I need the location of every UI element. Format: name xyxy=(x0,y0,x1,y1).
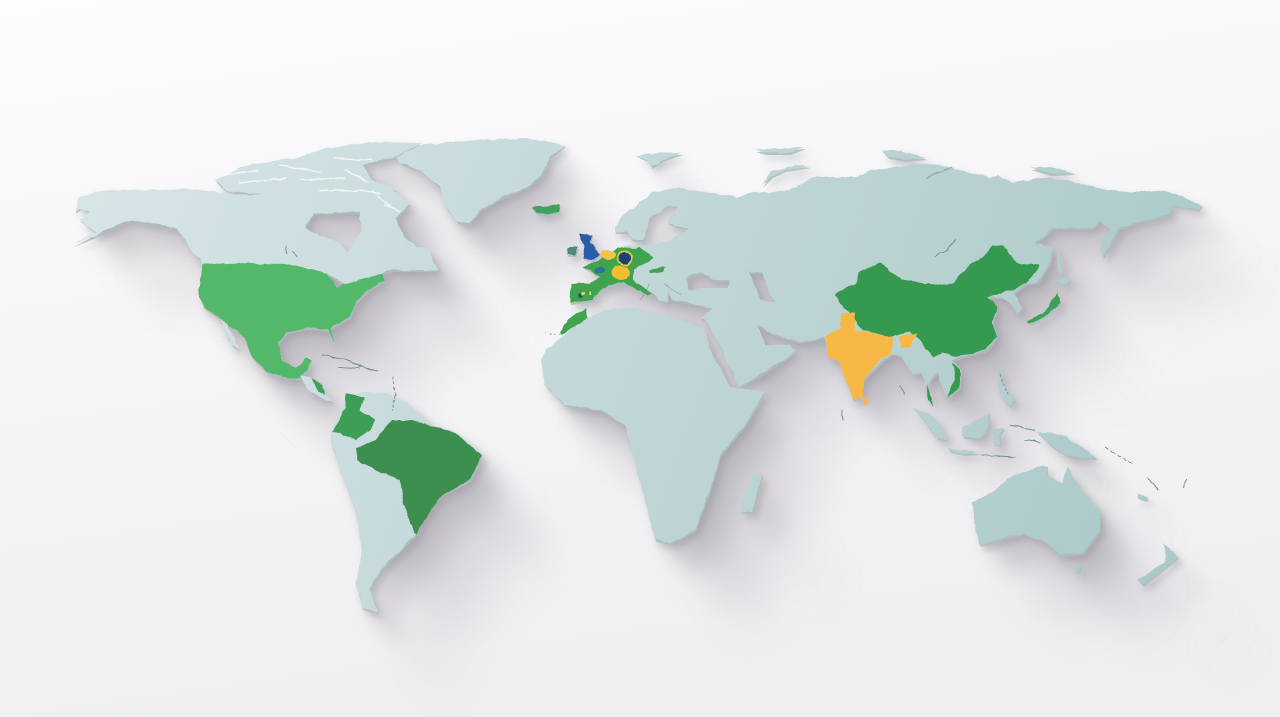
Africa xyxy=(541,307,765,543)
Central America xyxy=(300,376,333,402)
Japan green xyxy=(1027,292,1060,324)
Tasmania xyxy=(1075,565,1081,572)
Morocco green xyxy=(560,308,588,335)
United States and Mexico xyxy=(198,263,385,378)
Java xyxy=(948,448,980,454)
Western and Central Europe green xyxy=(570,247,653,303)
Sulawesi xyxy=(993,428,1005,445)
Novaya Zemlya xyxy=(762,165,810,186)
world map xyxy=(73,138,1202,612)
New Guinea xyxy=(1037,432,1097,458)
Germany flag disc xyxy=(617,250,633,266)
Greenland xyxy=(397,138,565,223)
Great Britain blue xyxy=(580,233,600,260)
Philippines xyxy=(996,368,1015,406)
Eurasia xyxy=(615,163,1202,407)
Ireland xyxy=(567,247,578,255)
North America: Canada and Alaska xyxy=(73,189,438,285)
Severnaya Zemlya xyxy=(882,150,926,160)
Europe cluster xyxy=(560,233,665,335)
Japan and Sakhalin xyxy=(1027,250,1072,324)
Ireland dark green xyxy=(567,247,578,255)
Borneo xyxy=(962,412,990,439)
land base silhouettes xyxy=(73,138,1202,612)
long soft shadows xyxy=(74,140,1280,704)
Great Britain xyxy=(580,233,600,260)
New Caledonia xyxy=(1138,494,1148,500)
Iceland xyxy=(532,205,560,215)
India xyxy=(825,313,893,400)
Australia xyxy=(972,465,1100,555)
Brazil xyxy=(356,420,482,535)
Arctic islands xyxy=(215,142,422,196)
Western Europe base xyxy=(570,247,653,303)
Siberian islands xyxy=(1030,167,1075,174)
Franz Josef Land xyxy=(755,147,805,153)
Balkan green patch xyxy=(650,267,665,273)
fine details: lakes, inlets, tiny islands xyxy=(286,168,1187,490)
US and Mexico base xyxy=(198,263,385,378)
Alps yellow xyxy=(611,266,629,280)
France blue mark xyxy=(595,267,605,273)
Svalbard xyxy=(636,153,682,167)
Colombia and Venezuela xyxy=(332,393,375,440)
Arctic archipelago channels xyxy=(225,158,400,212)
South America xyxy=(330,392,482,612)
Spain flag marks xyxy=(579,292,592,297)
Madagascar xyxy=(740,472,762,512)
Central America green patch xyxy=(312,378,325,396)
Iceland green xyxy=(532,205,560,215)
Kamchatka xyxy=(1100,227,1120,257)
Germany flag inner xyxy=(619,252,631,264)
China xyxy=(835,245,1040,357)
Vietnam and Malaysia strips xyxy=(926,362,960,407)
New Zealand xyxy=(1138,543,1178,585)
Sumatra xyxy=(913,407,948,440)
Sri Lanka and northeast India xyxy=(862,333,917,405)
Low Countries yellow xyxy=(600,250,616,260)
Baja California xyxy=(222,320,239,350)
